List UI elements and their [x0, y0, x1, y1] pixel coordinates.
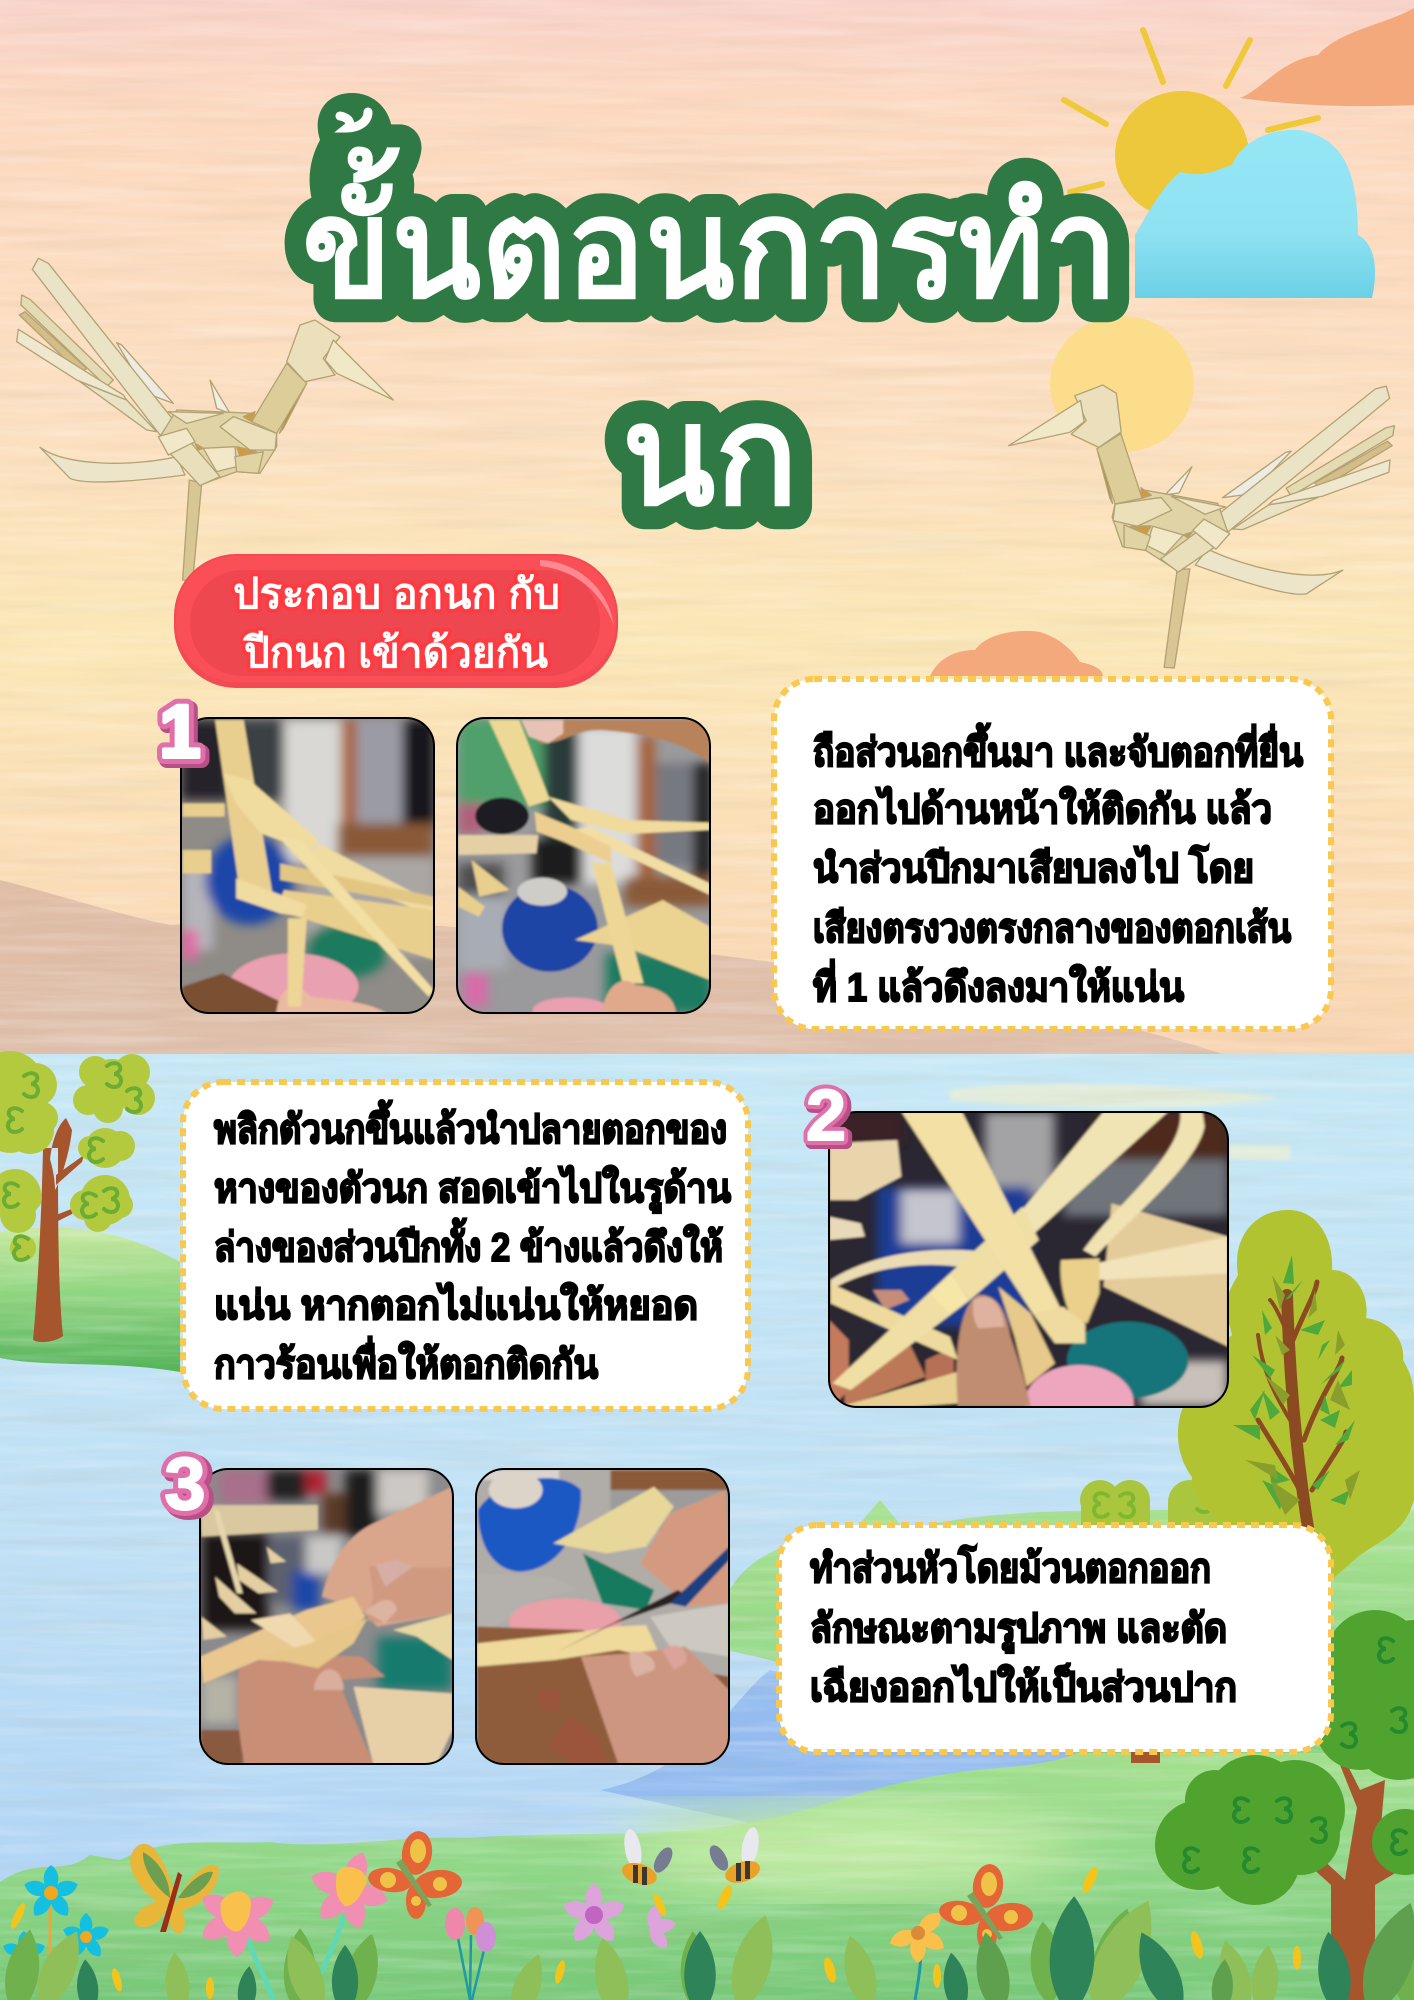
- hand: [829, 1320, 849, 1407]
- text box: step 3: ทำส่วนหัวโดยม้วนตอกออก: [810, 1545, 1211, 1591]
- raised tone mark backing: [310, 93, 392, 200]
- text box: step 3: เฉียงออกไปให้เป็นส่วนปาก: [810, 1662, 1237, 1710]
- icon: yellow flower: [887, 1908, 948, 2000]
- branches: [1258, 1282, 1346, 1540]
- badge: number 3: 3: [168, 1445, 210, 1528]
- bird right: [968, 308, 1407, 706]
- badge: number 3: 3: [164, 1442, 206, 1525]
- lower green bank: [0, 1753, 1414, 2000]
- straw strips: [831, 1112, 1228, 1407]
- bushes: [1080, 1480, 1245, 1532]
- leaf marks: [1184, 1638, 1406, 1872]
- badge: number 1: 1: [162, 693, 204, 776]
- trunk stub behind text box: [1131, 1750, 1160, 1763]
- straw strips: [458, 720, 710, 983]
- heading pill: [174, 554, 618, 688]
- photo: step 3 left: [195, 1467, 456, 1767]
- badge: number 3: 3: [164, 1442, 206, 1525]
- icon: yellow butterfly: [130, 1844, 219, 1934]
- text box: step 1: [774, 679, 1331, 1029]
- river deeper blue: [600, 1670, 1077, 1825]
- icon: pink flower right: [308, 1849, 390, 2000]
- heading pill: ประกอบ อกนก กับ: [233, 570, 560, 617]
- thumb: [957, 1295, 1031, 1407]
- icon: small orange cloud: [930, 631, 1103, 676]
- background: peach painted upper panel: [0, 0, 1414, 1060]
- yellow buds on stems: [8, 1865, 1301, 1999]
- text box: step 1: เสียงตรงวงตรงกลางของตอกเส้น: [813, 907, 1291, 951]
- leaf marks: [4, 1063, 141, 1260]
- title: นก: [622, 377, 798, 534]
- raised tone mark: [340, 112, 368, 128]
- badge: number 1: 1: [159, 690, 201, 773]
- hands and strip: [322, 1487, 452, 1627]
- right upper bank: [725, 1500, 1414, 1800]
- bird left: [17, 258, 393, 582]
- icon: purple flowers: [561, 1883, 677, 1952]
- icon: bee left: [619, 1828, 676, 1889]
- icon: sun with rays: [1064, 30, 1318, 219]
- distant pale cream clouds: [950, 1084, 1290, 1160]
- icon: blue cloud: [1135, 130, 1375, 298]
- badge: number 2: 2: [809, 1079, 849, 1159]
- canopy: [1155, 1610, 1414, 1905]
- text box: step 1: ถือส่วนอกขึ้นมา และจับตอกที่ยื่น: [813, 723, 1303, 775]
- leaf triangles: [1233, 1255, 1355, 1510]
- photo: step 3 right: [472, 1467, 733, 1767]
- icon: pink flower left: [197, 1888, 278, 2000]
- badge: number 2: 2: [806, 1076, 846, 1156]
- canopy: [0, 1051, 155, 1261]
- icon: right orange butterfly: [938, 1862, 1034, 1952]
- foreground leaves: [0, 1891, 1414, 2000]
- text box: step 3: ลักษณะตามรูปภาพ และตัด: [810, 1607, 1227, 1653]
- pale highlight on grass: [620, 1805, 1080, 1895]
- background: blue painted lower panel: [0, 1054, 1414, 2000]
- trunk: [33, 1118, 72, 1342]
- photo: step 1 right: [452, 717, 716, 1023]
- text box: step 1: ที่ 1 แล้วดึงลงมาให้แน่น: [813, 959, 1184, 1010]
- icon: cyan flowers: [1, 1865, 111, 1974]
- title: [302, 93, 1118, 534]
- text box: step 1: นำส่วนปีกมาเสียบลงไป โดย: [813, 845, 1254, 891]
- tree: right lime tree with bushes: [1080, 1210, 1414, 1590]
- text box: step 2: กาวร้อนเพื่อให้ตอกติดกัน: [214, 1336, 598, 1387]
- badge: number 2: 2: [806, 1076, 846, 1156]
- straw strips: [183, 720, 434, 1007]
- background: mountains: [0, 880, 1240, 1060]
- text box: step 2: พลิกตัวนกขึ้นแล้วนำปลายตอกของ: [214, 1100, 727, 1152]
- icon: bee right: [706, 1826, 763, 1887]
- icon: tulips: [445, 1907, 496, 2000]
- text box: step 1: ออกไปด้านหน้าให้ติดกัน แล้ว: [813, 786, 1272, 832]
- tree: left lime tree: [0, 1051, 155, 1342]
- badge: number 1: 1: [159, 690, 201, 773]
- text box: step 2: ล่างของส่วนปีกทั้ง 2 ข้างแล้วดึงให้: [214, 1218, 723, 1270]
- title: ขั้นตอนการทำ: [302, 146, 1118, 327]
- heading pill: ปีกนก เข้าด้วยกัน: [243, 629, 548, 676]
- icon: orange butterfly: [367, 1829, 463, 1919]
- trunk and branches: [1310, 1780, 1414, 2000]
- icon: orange cloud top right: [1240, 8, 1414, 106]
- photo: step 2: [828, 1111, 1229, 1408]
- icon: pale yellow sun: [1050, 316, 1194, 452]
- text box: step 3: [779, 1525, 1331, 1752]
- photo: step 1 left: [177, 717, 441, 1020]
- text box: step 2: หางของตัวนก สอดเข้าไปในรูด้าน: [214, 1165, 731, 1213]
- tree: lower right green tree: [1131, 1610, 1414, 2000]
- left green hill: [0, 1228, 180, 1372]
- canopy: [1178, 1210, 1414, 1590]
- text box: step 2: [183, 1082, 748, 1409]
- text box: step 2: แน่น หากตอกไม่แน่นให้หยอด: [214, 1282, 698, 1328]
